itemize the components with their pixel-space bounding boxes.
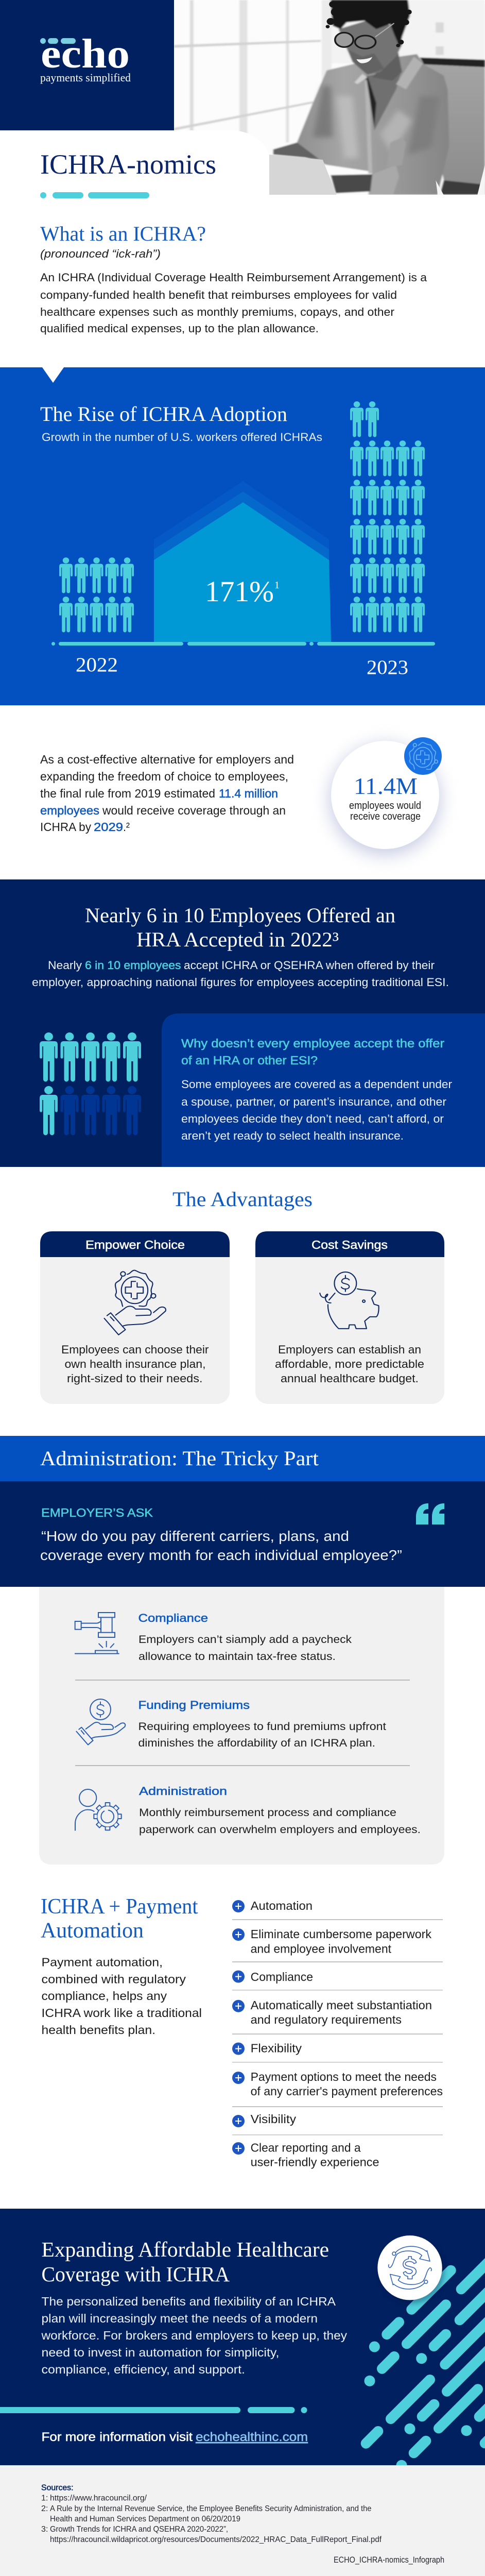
definition text: company-funded health benefit that reimburses employees for valid	[40, 289, 397, 301]
description: Payment automation,	[41, 1956, 163, 1969]
icon: person with gear	[75, 1789, 122, 1831]
text block: cost-effective alternative: 11.4 million	[219, 787, 278, 800]
card text: Employees can choose their	[61, 1343, 209, 1356]
heading: Expanding Affordable Healthcare	[41, 2238, 329, 2261]
panel: rise of ICHRA adoption	[0, 367, 485, 705]
description: compliance, efficiency, and support.	[41, 2363, 245, 2376]
text block: cost-effective alternative: 2029	[94, 820, 123, 834]
notch arrow	[42, 367, 64, 383]
year label 2022: 2022	[76, 654, 118, 676]
title panel background	[0, 130, 485, 367]
icon: recurring dollar payment	[377, 2235, 444, 2303]
source list: 3:	[41, 2525, 48, 2534]
text block: cost-effective alternative: .²	[123, 820, 130, 834]
card: cost savings	[255, 1231, 444, 1404]
list text: Flexibility	[251, 2041, 302, 2055]
summary text	[32, 959, 449, 989]
heading	[41, 2238, 329, 2286]
panel: employer's ask	[0, 1481, 485, 1587]
callout: 11.4M circle	[330, 737, 442, 855]
card title: Empower Choice	[85, 1238, 185, 1251]
panel: administration challenges	[39, 1587, 444, 1865]
answer: aren’t yet ready to select health insurance.	[181, 1129, 404, 1142]
item heading: Administration	[139, 1785, 227, 1798]
card text: right-sized to their needs.	[67, 1372, 203, 1385]
icon: medical badge	[404, 737, 442, 775]
source list: A Rule by the Internal Revenue Service, the Employee Benefits Security Administration, and the	[50, 2504, 372, 2513]
question: of an HRA or other ESI?	[181, 1054, 318, 1067]
diagonal stripes	[365, 2258, 485, 2471]
description: ICHRA work like a traditional	[41, 2006, 202, 2020]
heading: Coverage with ICHRA	[41, 2262, 230, 2286]
stat caption	[349, 800, 421, 822]
source list: https://hracouncil.wildapricot.org/resources/Documents/2022_HRAC_Data_FullReport_Final.pdf	[50, 2535, 382, 2544]
hero photo: smiling woman at laptop	[174, 0, 485, 199]
answer	[181, 1078, 452, 1142]
source list: Health and Human Services Department on 06/20/2019	[50, 2515, 240, 2523]
text block: cost-effective alternative	[40, 753, 294, 834]
banner: administration heading: Administration: The Tricky Part	[40, 1447, 319, 1470]
text block: cost-effective alternative: expanding the freedom of choice to employees,	[40, 770, 288, 783]
summary text: accept ICHRA or QSEHRA when offered by their	[184, 959, 435, 972]
source list: 1:	[41, 2494, 48, 2503]
heading: ICHRA + Payment	[41, 1895, 198, 1919]
item text	[138, 1721, 386, 1749]
source list	[41, 2494, 382, 2544]
call to action: For more information visit	[41, 2430, 193, 2444]
house growth arrow	[154, 481, 331, 642]
call to action: echohealthinc.com	[196, 2430, 308, 2444]
panel: logo block	[0, 0, 174, 130]
source list: https://www.hracouncil.org/	[50, 2494, 147, 2503]
item text: allowance to maintain tax-free status.	[138, 1651, 336, 1663]
list text: and employee involvement	[251, 1942, 392, 1956]
people: 6 of 10	[40, 1032, 141, 1136]
growth figure: 1	[274, 580, 280, 591]
heading	[41, 1895, 198, 1942]
people 2022	[59, 557, 134, 632]
icon: hand with coin	[76, 1699, 125, 1745]
answer: a spouse, partner, or parent’s insurance, and other	[181, 1095, 446, 1108]
section: ICHRA + payment automation	[41, 1895, 443, 2169]
description: plan will increasingly meet the needs of a modern	[41, 2312, 318, 2325]
summary text: 6 in 10 employees	[85, 959, 181, 972]
item text	[139, 1807, 421, 1836]
list text: user-friendly experience	[251, 2156, 379, 2169]
title: ICHRA-nomics	[40, 149, 216, 180]
sources heading: Sources:	[41, 2483, 73, 2493]
section: what is an ICHRA	[40, 222, 427, 335]
icon: piggy bank with coin	[320, 1272, 379, 1329]
definition text: qualified medical expenses, up to the plan allowance.	[40, 322, 319, 335]
item: administration	[75, 1785, 421, 1836]
list text: Payment options to meet the needs	[251, 2070, 437, 2083]
definition text: An ICHRA (Individual Coverage Health Reimbursement Arrangement) is a	[40, 271, 427, 284]
description: need to invest in automation for simplicity,	[41, 2346, 279, 2359]
stat value: 11.4M	[354, 773, 418, 799]
card text	[61, 1343, 209, 1385]
list text: and regulatory requirements	[251, 2013, 402, 2026]
heading: HRA Accepted in 2022³	[136, 928, 339, 951]
banner: administration heading	[0, 1436, 485, 1481]
panel: nearly 6 in 10 employees	[0, 879, 485, 1167]
description	[41, 1956, 202, 2037]
description: combined with regulatory	[41, 1972, 186, 1986]
icon: quotation mark	[416, 1503, 444, 1524]
axis bar	[51, 642, 435, 646]
item heading: Compliance	[138, 1612, 208, 1624]
item: funding premiums	[76, 1699, 386, 1749]
list text: Automation	[251, 1899, 313, 1912]
text block: cost-effective alternative: the final rule from 2019 estimated	[40, 787, 215, 800]
card text	[275, 1343, 424, 1385]
summary text: Nearly	[48, 959, 82, 972]
logo dots	[40, 38, 76, 44]
list text: Automatically meet substantiation	[251, 1998, 432, 2012]
subheading: Growth in the number of U.S. workers offered ICHRAs	[42, 431, 322, 444]
answer: employees decide they don’t need, can’t afford, or	[181, 1112, 444, 1125]
file reference: ECHO_ICHRA-nomics_Infograph	[334, 2555, 444, 2565]
description	[41, 2295, 348, 2376]
bullet icons	[232, 1900, 245, 2155]
answer: Some employees are covered as a dependent under	[181, 1078, 452, 1091]
card text: annual healthcare budget.	[281, 1372, 419, 1385]
heading	[85, 904, 395, 951]
text block: cost-effective alternative: As a cost-effective alternative for employers and	[40, 753, 294, 766]
item text: paperwork can overwhelm employers and employees.	[139, 1824, 421, 1836]
panel: expanding affordable healthcare	[0, 2209, 485, 2471]
list text: of any carrier's payment preferences	[251, 2084, 443, 2098]
source list: Growth Trends for ICHRA and QSEHRA 2020-2022”,	[50, 2525, 228, 2534]
growth figure: 171%	[205, 575, 274, 608]
list text: Compliance	[251, 1970, 313, 1984]
item: compliance	[75, 1612, 352, 1663]
title accent bars	[40, 192, 149, 198]
heading: The Rise of ICHRA Adoption	[40, 402, 287, 426]
question: Why doesn’t every employee accept the offer	[181, 1037, 444, 1050]
summary text: employer, approaching national figures for employees accepting traditional ESI.	[32, 976, 449, 989]
heading: Automation	[41, 1919, 144, 1942]
icon: hand with medical badge	[104, 1270, 166, 1335]
feature list	[232, 1899, 443, 2169]
item heading: Funding Premiums	[138, 1699, 250, 1711]
stat caption: receive coverage	[350, 810, 421, 822]
description: workforce. For brokers and employers to keep up, they	[41, 2329, 348, 2342]
call to action	[41, 2430, 308, 2444]
text block: cost-effective alternative: ICHRA by	[40, 820, 91, 834]
quote	[40, 1528, 402, 1563]
description: The personalized benefits and flexibility of an ICHRA	[41, 2295, 336, 2308]
card text: affordable, more predictable	[275, 1358, 424, 1370]
logo tagline: payments simplified	[40, 71, 131, 84]
panel: why doesn't every employee accept	[162, 1013, 485, 1167]
heading: Nearly 6 in 10 Employees Offered an	[85, 904, 395, 927]
definition text: healthcare expenses such as monthly premiums, copays, and other	[40, 306, 395, 318]
text block: cost-effective alternative: would receive coverage through an	[102, 804, 286, 817]
accent bars	[0, 2407, 307, 2413]
heading: What is an ICHRA?	[40, 222, 206, 245]
item text: Monthly reimbursement process and compliance	[139, 1807, 396, 1819]
list text: Eliminate cumbersome paperwork	[251, 1927, 431, 1941]
card text: own health insurance plan,	[65, 1358, 206, 1370]
icon: gavel	[75, 1613, 119, 1654]
list text: Clear reporting and a	[251, 2141, 361, 2155]
quote: “How do you pay different carriers, plans, and	[41, 1528, 349, 1544]
stat caption: employees would	[349, 800, 421, 811]
panel: sources	[0, 2465, 485, 2576]
source list: 2:	[41, 2504, 48, 2513]
item text: diminishes the affordability of an ICHRA plan.	[138, 1737, 375, 1749]
label: EMPLOYER’S ASK	[41, 1506, 153, 1519]
definition text	[40, 271, 427, 335]
people 2023	[350, 401, 425, 632]
pronunciation: (pronounced “ick-rah”)	[40, 247, 161, 260]
heading: the advantages: The Advantages	[172, 1188, 313, 1211]
question	[181, 1037, 444, 1067]
quote: coverage every month for each individual employee?”	[40, 1547, 402, 1563]
logo wordmark: echo	[41, 31, 130, 77]
card: empower choice	[40, 1231, 230, 1404]
description: health benefits plan.	[41, 2023, 155, 2037]
card text: Employers can establish an	[278, 1343, 421, 1356]
list text	[251, 1899, 443, 2169]
item text: Employers can’t siamply add a paycheck	[138, 1634, 352, 1646]
description: compliance, helps any	[41, 1989, 167, 2003]
text block: cost-effective alternative: employees	[40, 804, 99, 817]
card title: Cost Savings	[311, 1238, 388, 1251]
list text: Visibility	[251, 2112, 297, 2126]
item text	[138, 1634, 352, 1663]
item text: Requiring employees to fund premiums upfront	[138, 1721, 386, 1733]
year label 2023: 2023	[367, 656, 408, 679]
